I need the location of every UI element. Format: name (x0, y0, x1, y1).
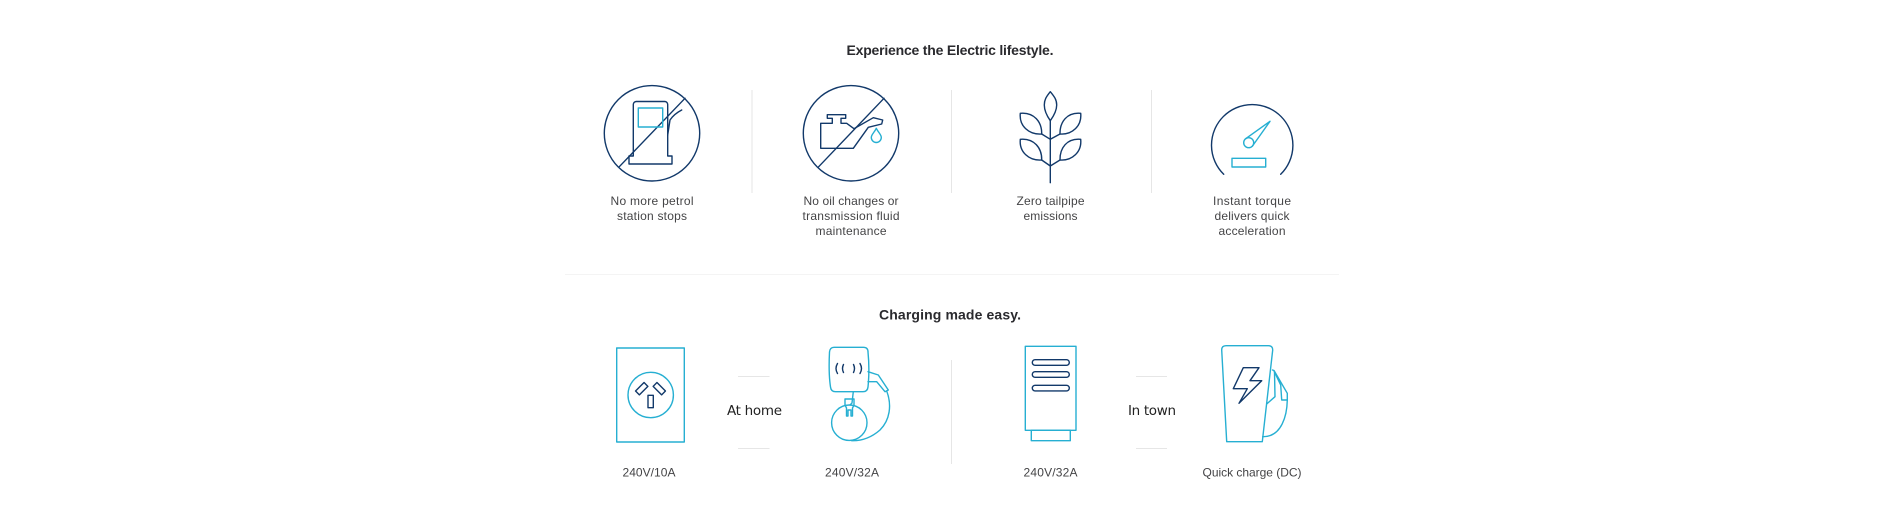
panel: instant torque: delivers quick (1214, 209, 1290, 223)
panel: zero emissions (1016, 92, 1085, 223)
heading: charging: Charging made easy. (879, 306, 1021, 322)
icon: crossed out oil can (803, 86, 899, 181)
panel: instant torque (1211, 105, 1293, 238)
icon: public AC charger (1025, 346, 1076, 441)
label: in town (1128, 376, 1176, 448)
panel: no petrol stops (604, 86, 700, 223)
caption: No oil changes or (804, 194, 898, 208)
caption: Zero tailpipe (1016, 194, 1085, 208)
caption: 240V/32A (1024, 466, 1078, 480)
label: at home (727, 376, 782, 448)
icon: plant (1020, 92, 1081, 183)
caption: No more petrol (610, 194, 694, 208)
label: in town: In town (1128, 403, 1176, 419)
icon: speedometer (1211, 105, 1293, 174)
panel: no oil changes: transmission fluid (802, 209, 900, 223)
panel: zero emissions: emissions (1024, 209, 1078, 223)
panel: instant torque: acceleration (1218, 224, 1286, 238)
panel: no oil changes: maintenance (816, 224, 887, 238)
caption: 240V/10A (622, 466, 676, 480)
icon: crossed out petrol pump (604, 86, 700, 181)
panel: no petrol stops: station stops (617, 209, 687, 223)
caption: 240V/32A (825, 466, 879, 480)
panel: no oil changes (802, 86, 900, 238)
label: at home: At home (727, 403, 782, 419)
icon: DC fast charger (1222, 346, 1287, 442)
icon: wall socket (617, 348, 684, 442)
panel: in town (1024, 346, 1302, 480)
heading: experience: Experience the Electric lifestyle. (846, 42, 1054, 58)
icon: wallbox charger (829, 347, 890, 441)
caption: Quick charge (DC) (1202, 466, 1302, 480)
panel: at home (617, 347, 890, 480)
caption: Instant torque (1213, 194, 1291, 208)
